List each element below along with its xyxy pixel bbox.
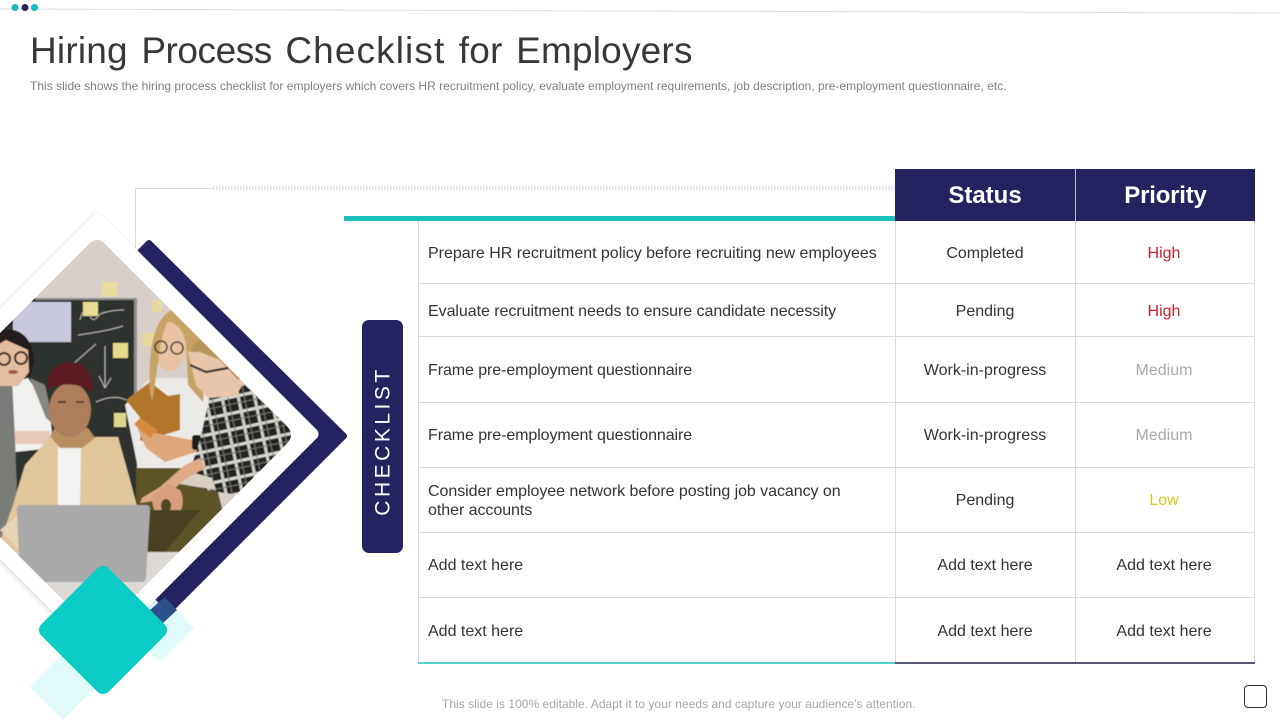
white diamond — [0, 220, 312, 648]
row 5: other accounts — [428, 502, 532, 519]
row 5: Pending — [956, 492, 1014, 509]
status heading: Status — [948, 182, 1022, 209]
row 7 — [428, 623, 1212, 640]
left woman — [0, 329, 54, 545]
row 1: Prepare HR recruitment policy before recruiting new employees — [428, 245, 877, 262]
row 7: Add text here — [937, 623, 1033, 640]
row 5: Low — [1149, 492, 1179, 509]
header line and dots — [0, 4, 1280, 14]
desk — [14, 552, 178, 601]
row 1: Completed — [946, 245, 1024, 262]
chevron overlap — [150, 597, 177, 623]
grid lines — [418, 221, 1255, 664]
row 4: Medium — [1136, 427, 1192, 444]
laptop — [17, 505, 150, 582]
centre man — [0, 362, 138, 552]
priority heading — [1075, 169, 1255, 221]
title: Hiring Process Checklist for Employers — [30, 30, 693, 71]
corner button — [1244, 685, 1267, 708]
right woman — [125, 309, 225, 552]
row 2 — [428, 303, 1180, 320]
row 3 — [428, 362, 1192, 379]
checklist label pill: CHECKLIST — [372, 366, 394, 516]
row 4: Frame pre-employment questionnaire — [428, 427, 692, 444]
teal accent bar — [344, 216, 895, 221]
row 4: Work-in-progress — [924, 427, 1046, 444]
row 4 — [428, 427, 1192, 444]
subtitle: This slide shows the hiring process checklist for employers which covers HR recruitment policy, evaluate employment requirements, job description, pre-employment questionnaire, etc. — [30, 79, 1007, 93]
row 1: High — [1148, 245, 1180, 262]
row 2: Evaluate recruitment needs to ensure candidate necessity — [428, 303, 836, 320]
row 5 — [428, 483, 1179, 519]
row 3: Work-in-progress — [924, 362, 1046, 379]
table header — [895, 169, 1255, 221]
pale diamonds — [30, 594, 194, 720]
checklist label pill — [362, 320, 403, 553]
teal diamond — [47, 574, 159, 686]
row 2: High — [1148, 303, 1180, 320]
blackboard — [0, 298, 137, 513]
photo of team around laptop — [0, 240, 291, 602]
footer note: This slide is 100% editable. Adapt it to your needs and capture your audience's attention. — [442, 697, 916, 711]
row 7: Add text here — [428, 623, 523, 640]
row 2: Pending — [956, 303, 1014, 320]
row 5: Consider employee network before posting job vacancy on — [428, 483, 841, 500]
plaid man — [140, 338, 296, 522]
row 1 — [428, 245, 1180, 262]
row 3: Frame pre-employment questionnaire — [428, 362, 692, 379]
row 6 — [428, 557, 1212, 574]
row 6: Add text here — [1116, 557, 1212, 574]
priority heading: Priority — [1124, 182, 1207, 209]
dotted frame line — [135, 186, 895, 249]
row 7: Add text here — [1116, 623, 1212, 640]
row 3: Medium — [1136, 362, 1192, 379]
row 6: Add text here — [428, 557, 523, 574]
row 6: Add text here — [937, 557, 1033, 574]
image panel with diamond photo — [0, 213, 347, 720]
navy chevron — [140, 243, 344, 610]
